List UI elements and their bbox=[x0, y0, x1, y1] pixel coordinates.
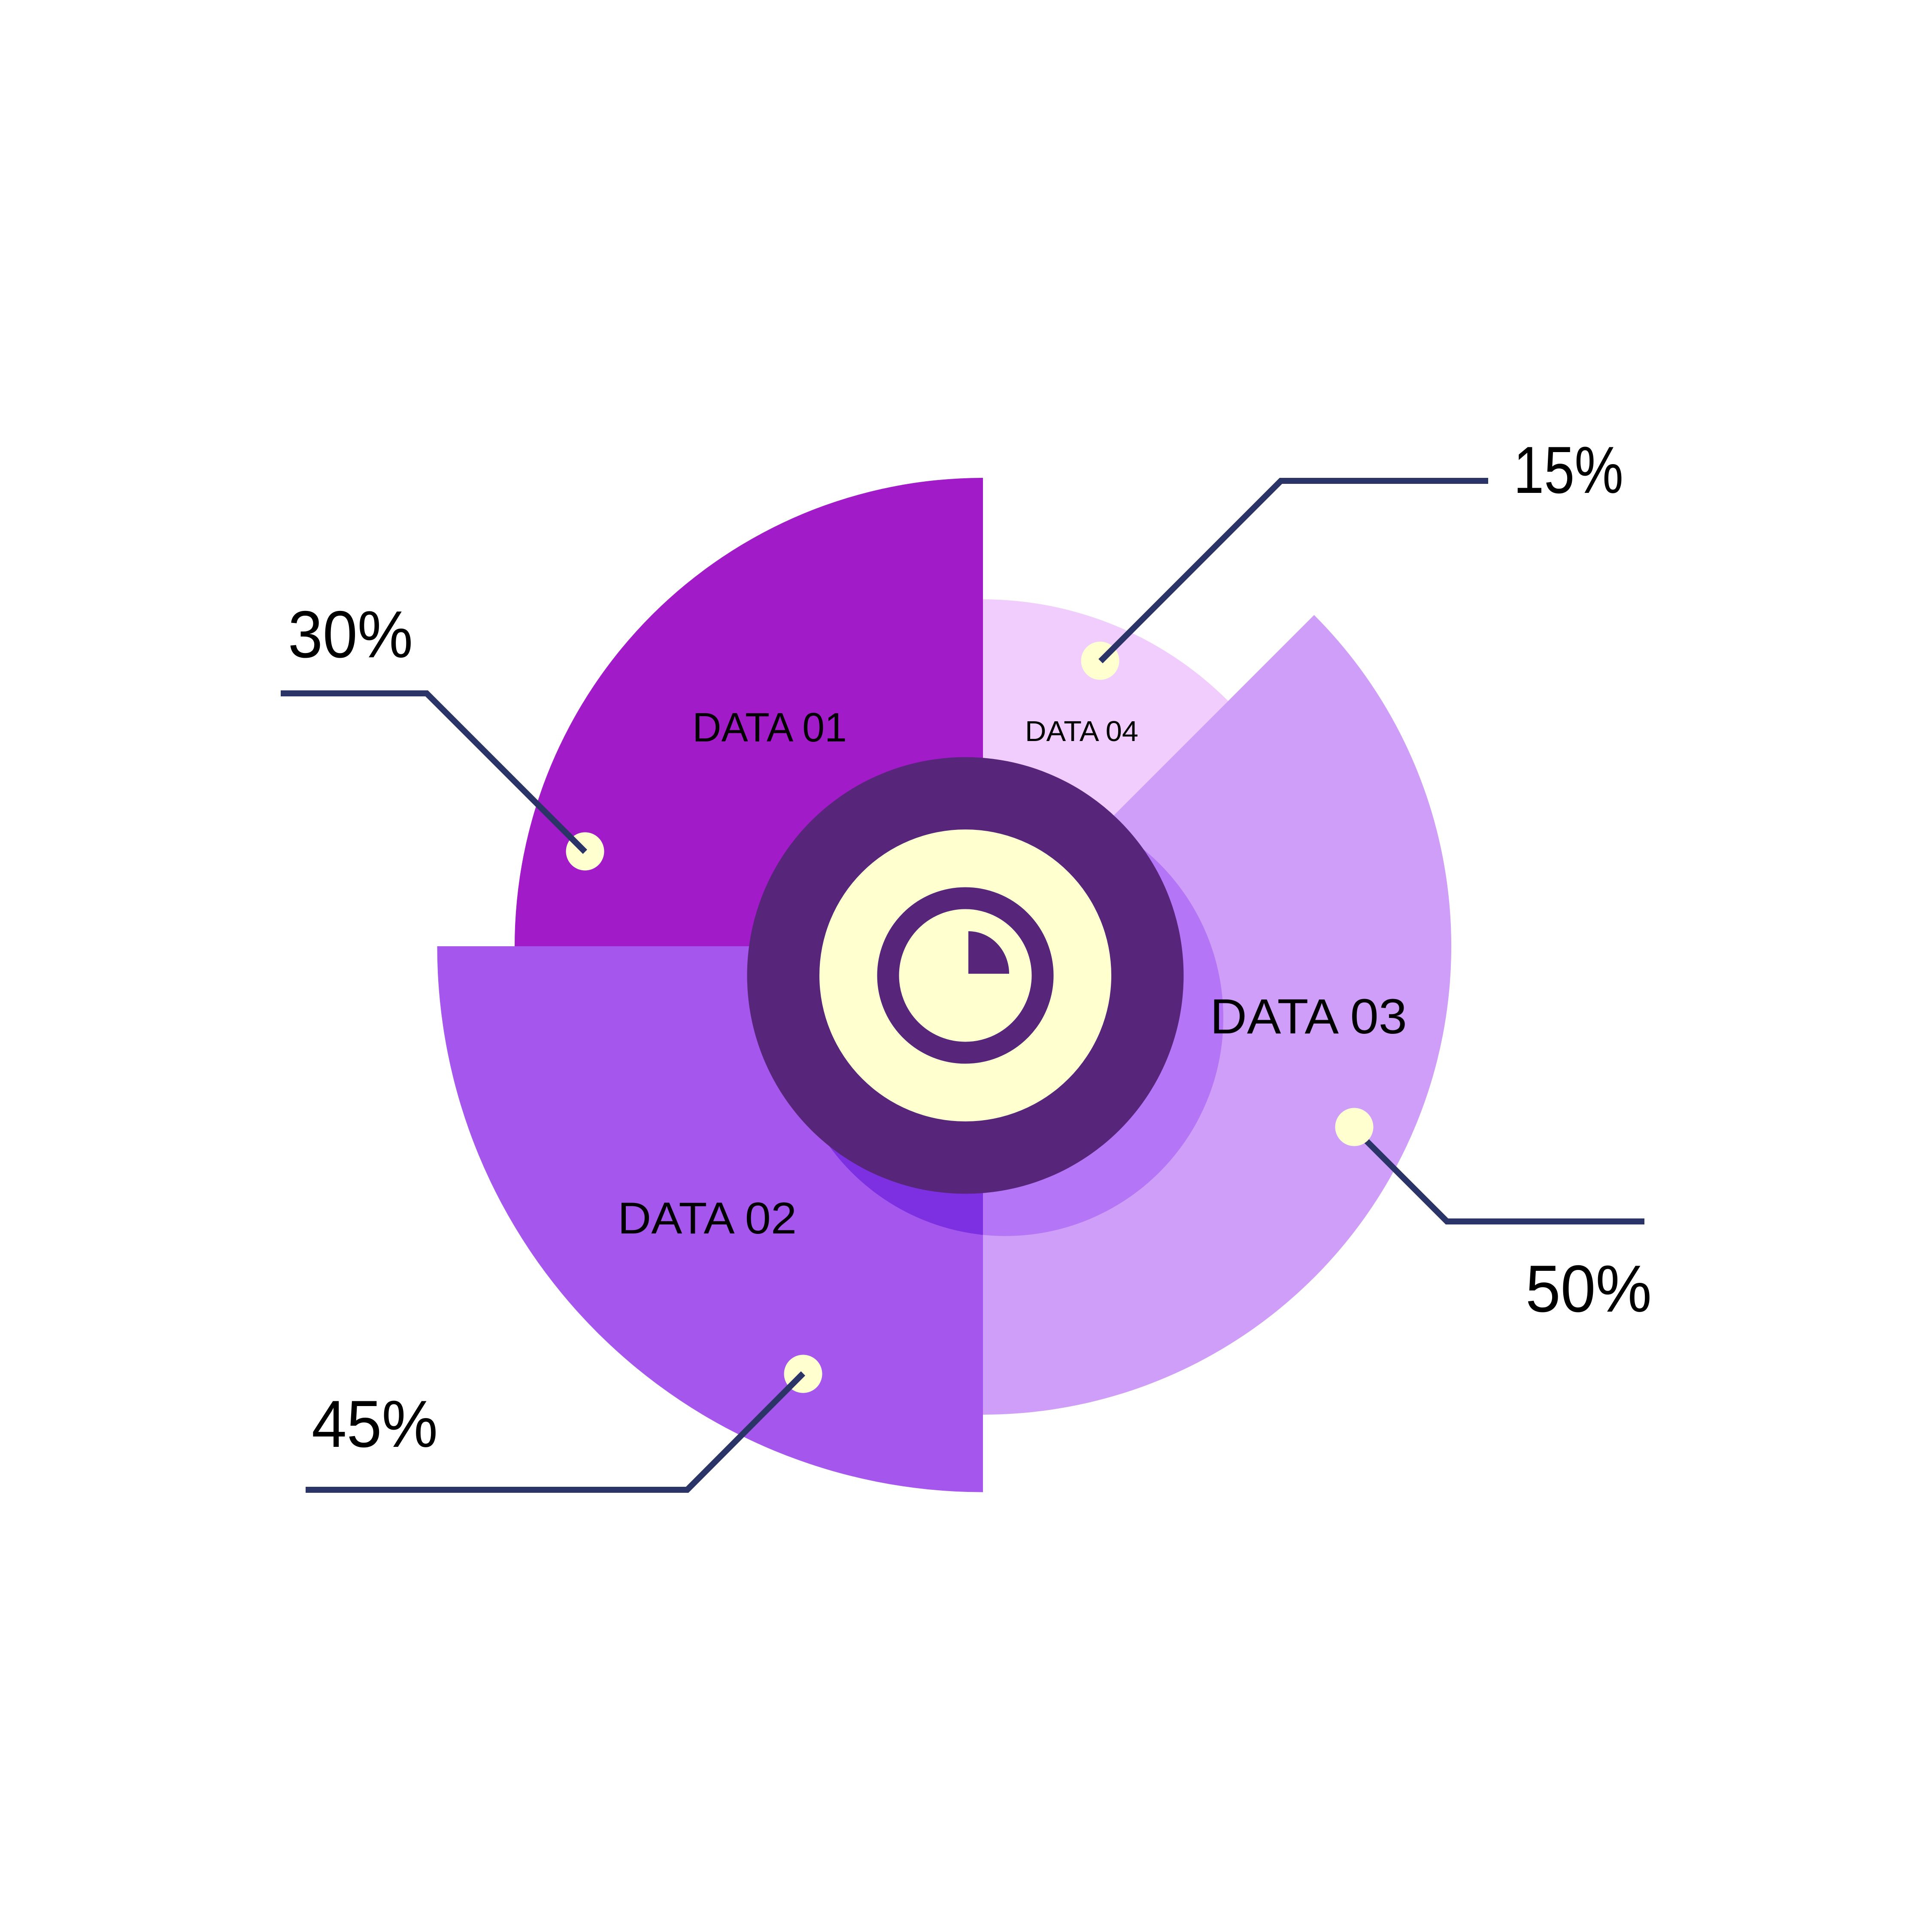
marker dot bbox=[566, 832, 604, 871]
sector: data 03 bbox=[983, 615, 1451, 1415]
callout: 30% bbox=[281, 597, 604, 871]
quarter slice bbox=[968, 931, 1009, 974]
outer dark circle bbox=[747, 757, 1184, 1194]
value: 45% bbox=[312, 1387, 438, 1461]
icon: pie ring bbox=[888, 898, 1043, 1053]
label: data 02: DATA 02 bbox=[618, 1194, 797, 1243]
ring bbox=[888, 898, 1043, 1053]
callout: 15% bbox=[1081, 433, 1623, 680]
callout: 50% bbox=[1335, 1108, 1652, 1326]
value: 15% bbox=[1513, 433, 1623, 507]
overlap circle: over data 03 bbox=[983, 849, 1223, 1236]
label: data 03: DATA 03 bbox=[1210, 989, 1407, 1044]
leader line bbox=[306, 1373, 803, 1490]
sector: data 04 bbox=[983, 599, 1228, 946]
overlap circle: over data 02 bbox=[828, 1073, 983, 1235]
marker dot bbox=[1081, 641, 1119, 680]
sector: data 02 bbox=[437, 946, 983, 1492]
marker dot bbox=[1335, 1108, 1374, 1146]
label: data 01: DATA 01 bbox=[692, 705, 847, 750]
leader line bbox=[1353, 1127, 1644, 1221]
cream circle bbox=[819, 829, 1111, 1121]
label: data 04: DATA 04 bbox=[1025, 715, 1138, 747]
center badge bbox=[747, 757, 1184, 1194]
sector: data 01 bbox=[515, 478, 983, 946]
pie chart bbox=[437, 478, 1451, 1492]
value: 50% bbox=[1526, 1252, 1652, 1326]
value: 30% bbox=[288, 597, 413, 671]
leader line bbox=[281, 693, 585, 852]
leader line bbox=[1101, 481, 1488, 661]
callout: 45% bbox=[306, 1355, 822, 1490]
marker dot bbox=[784, 1355, 822, 1393]
